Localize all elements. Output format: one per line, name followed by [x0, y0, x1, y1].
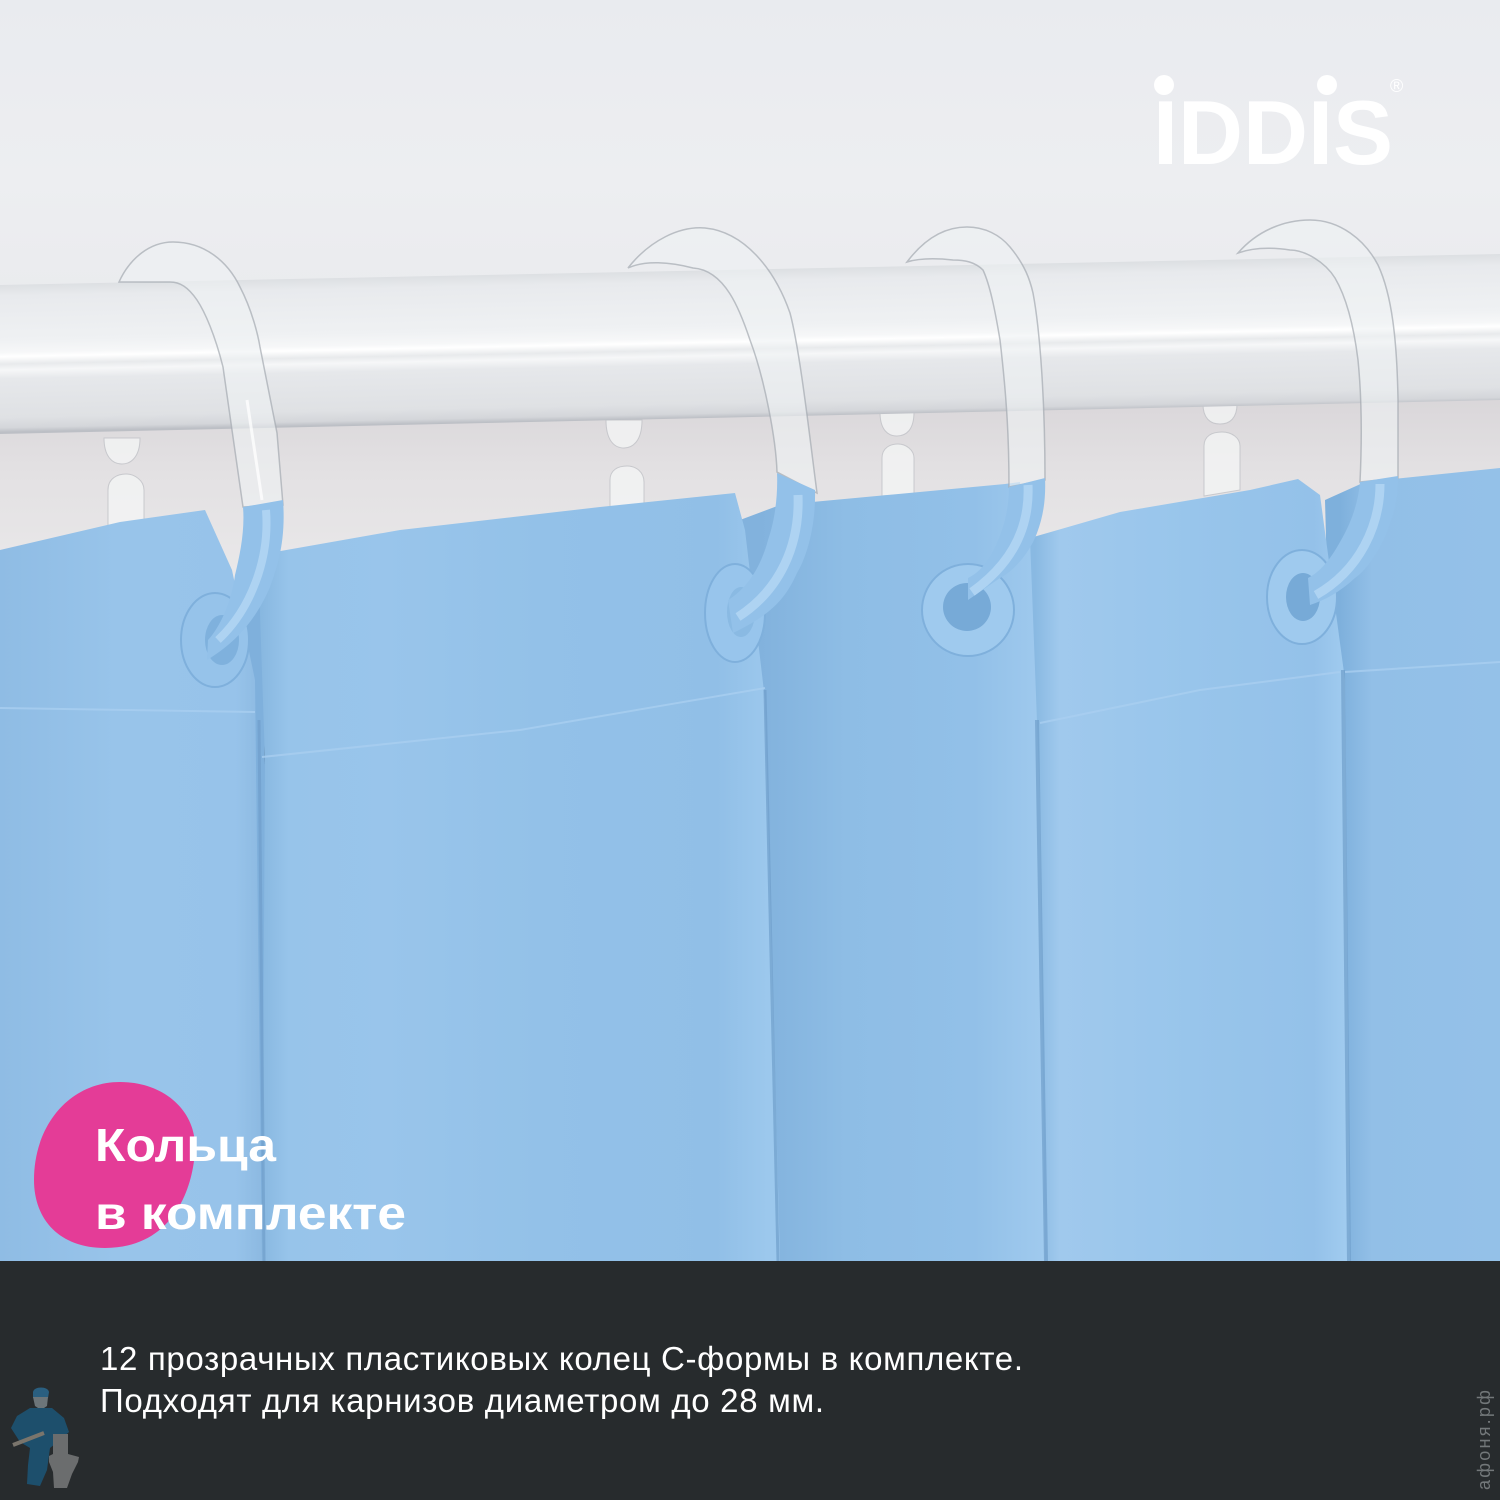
grommet: [1267, 550, 1337, 644]
curtain panel 2: [258, 493, 780, 1261]
curtain ring 2: [628, 228, 817, 662]
dark footer panel: [0, 1261, 1500, 1500]
curtain ring 1: [119, 242, 284, 687]
hooks behind the rod: [104, 404, 1240, 526]
hem seam: [0, 662, 1500, 757]
grommet: [181, 593, 249, 687]
curtain ring 4: [1238, 220, 1398, 644]
description text: Подходят для карнизов диаметром до 28 мм.: [100, 1382, 824, 1419]
pink blob badge: [34, 1082, 195, 1248]
curtain panel 4: [1030, 479, 1350, 1261]
background wall: [0, 0, 1500, 300]
icon: plumber with toilet: [11, 1388, 79, 1488]
description text: 12 прозрачных пластиковых колец С-формы в комплекте.: [100, 1340, 1023, 1377]
brand logo: IDDIS: IDDIS: [1153, 83, 1393, 184]
curtain panel 5: [1325, 468, 1500, 1261]
curtain ring 3: [907, 227, 1045, 656]
fold shadows: [259, 670, 1349, 1261]
brand logo: IDDIS: ®: [1390, 76, 1403, 96]
heading: [95, 1119, 406, 1239]
heading: в комплекте: [95, 1187, 406, 1239]
heading: Кольца: [95, 1119, 276, 1171]
description text: [100, 1340, 1023, 1419]
curtain panel 3: [740, 482, 1050, 1261]
blue curtain: [0, 468, 1500, 1261]
curtain panel 1: [0, 510, 262, 1261]
watermark: афоня.рф: [1474, 1390, 1494, 1490]
grommet: [705, 564, 765, 662]
shower curtain rod: [0, 254, 1500, 434]
back wall under the rod: [0, 395, 1500, 620]
fold backing: [235, 553, 272, 1261]
grommet: [922, 564, 1014, 656]
